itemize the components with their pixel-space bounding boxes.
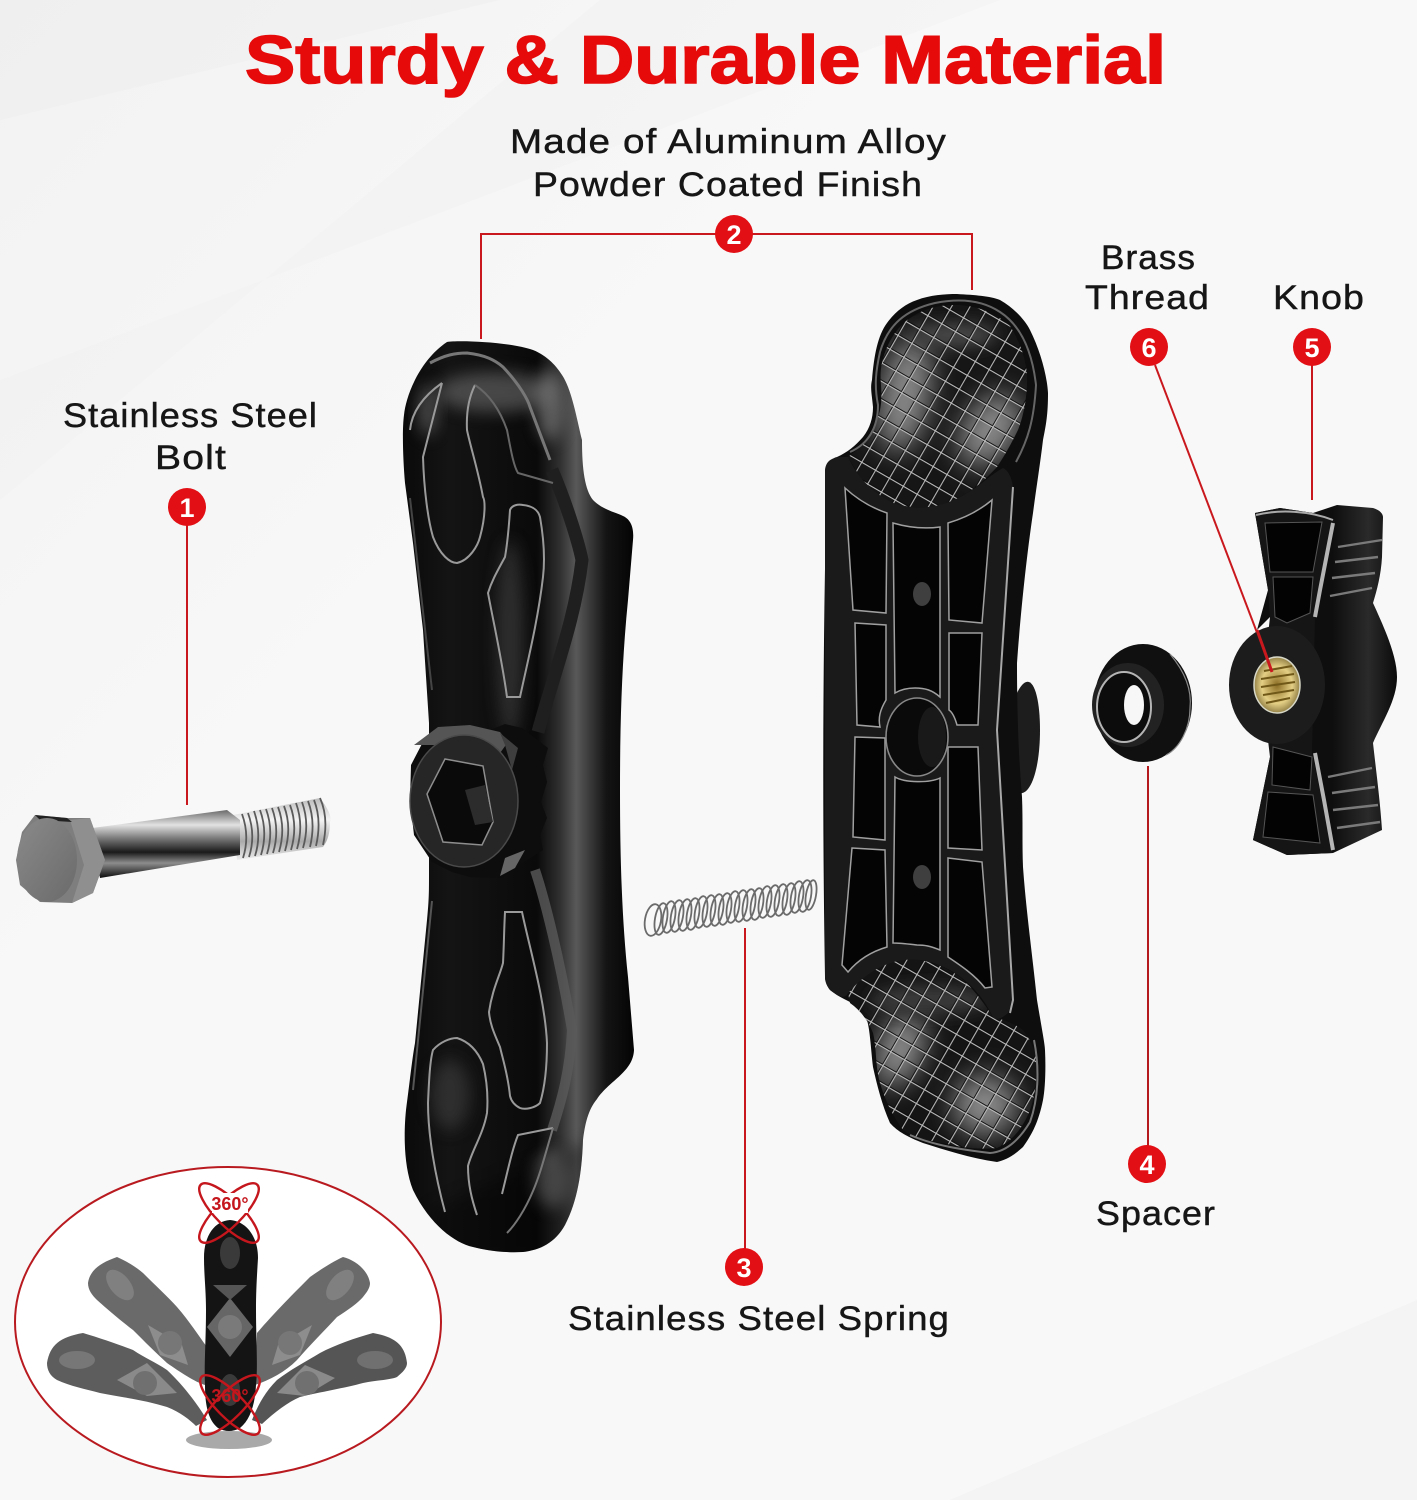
- label: brass thread: Brass: [1101, 239, 1196, 277]
- near right arm: [255, 1257, 370, 1385]
- label: aluminum alloy: [510, 123, 947, 204]
- callout 6: 6: [1141, 333, 1157, 363]
- title: Sturdy & Durable Material: [245, 22, 1166, 98]
- arm highlights: [418, 369, 590, 1260]
- callout 1: [168, 488, 206, 805]
- callout 4: [1128, 766, 1166, 1183]
- icon: spacer: [1092, 644, 1192, 762]
- 360 bottom marker: [193, 1368, 267, 1442]
- front arm: [403, 341, 634, 1260]
- callout 6: [1130, 328, 1272, 672]
- callout 3: 3: [736, 1253, 752, 1283]
- base plate: [186, 1431, 272, 1449]
- callout 5: 5: [1304, 333, 1320, 363]
- label: stainless steel bolt: Bolt: [155, 439, 227, 477]
- far right arm: [252, 1333, 407, 1424]
- label: aluminum alloy: Powder Coated Finish: [533, 166, 923, 204]
- 360 top marker: 360°: [211, 1194, 249, 1214]
- near left arm: [88, 1257, 207, 1385]
- dish rims: [850, 300, 1037, 1153]
- bracket callout 2: [481, 215, 972, 339]
- callout 4: 4: [1139, 1150, 1155, 1180]
- label: brass thread: Thread: [1085, 279, 1210, 317]
- icon: knob: [1229, 505, 1397, 855]
- far left arm: [47, 1333, 207, 1426]
- knob pockets: [1263, 522, 1322, 843]
- dark strip: [538, 470, 582, 732]
- knob ribs: [1328, 540, 1382, 828]
- callout 1: 1: [179, 493, 195, 523]
- label: knob: Knob: [1273, 279, 1365, 317]
- center arm: [204, 1220, 258, 1431]
- mounting holes: [886, 582, 948, 889]
- icon: spring: [642, 879, 819, 937]
- ribs frame: [825, 457, 1013, 1019]
- label: stainless steel spring: Stainless Steel Spring: [568, 1300, 950, 1338]
- label: stainless steel bolt: [63, 397, 318, 477]
- knurled dish top: [850, 305, 1027, 507]
- icon: bolt: [16, 798, 331, 903]
- label: spacer: Spacer: [1096, 1195, 1216, 1233]
- back arm: [823, 294, 1050, 1162]
- label: brass thread: [1085, 239, 1210, 317]
- 360 top marker: [192, 1176, 266, 1250]
- callout 3: [725, 928, 763, 1286]
- label: stainless steel bolt: Stainless Steel: [63, 397, 318, 435]
- arm engraved lines: [410, 353, 553, 1233]
- knurled dish bottom: [848, 960, 1036, 1149]
- inset: 360 rotation: [15, 1167, 441, 1477]
- lower light strip: [535, 870, 572, 1130]
- 360 bottom marker: 360°: [211, 1386, 249, 1406]
- callout 5: [1293, 328, 1331, 500]
- label: aluminum alloy: Made of Aluminum Alloy: [510, 123, 947, 161]
- bracket callout 2: 2: [726, 220, 742, 250]
- frame pockets: [842, 488, 992, 988]
- hex hub: [410, 724, 548, 878]
